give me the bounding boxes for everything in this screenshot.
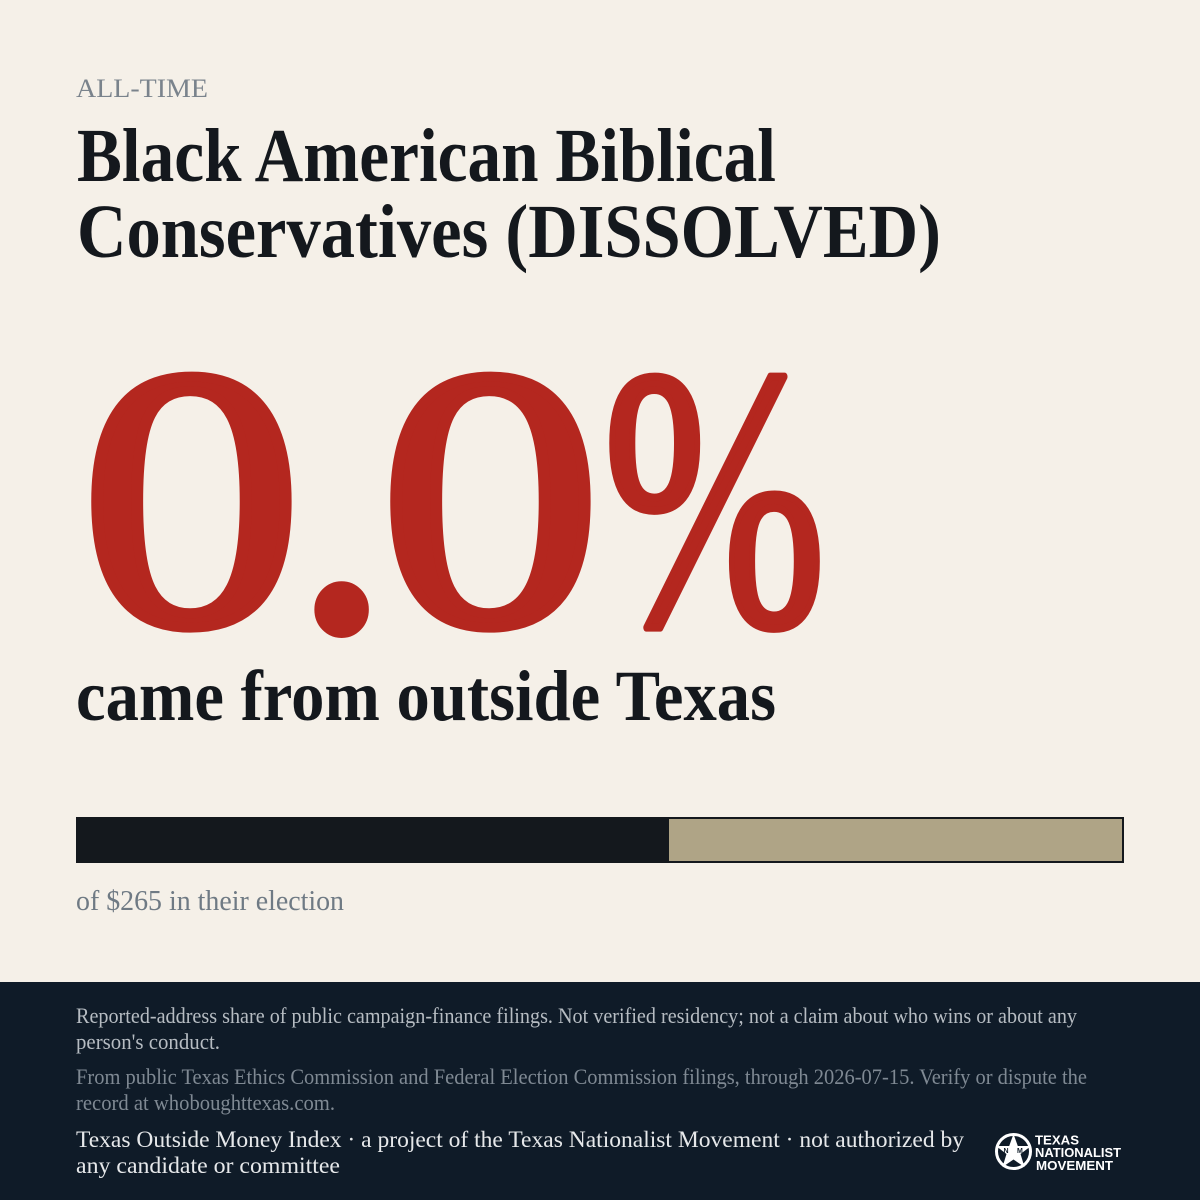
logo: Texas Nationalist Movement (996, 1132, 1121, 1173)
disclaimer text (76, 1003, 1077, 1054)
source text (76, 1064, 1087, 1115)
logo wordmark: TEXAS (1035, 1132, 1079, 1148)
big percentage: 0 (80, 293, 303, 705)
attribution text: any candidate or committee (76, 1153, 340, 1178)
source text: From public Texas Ethics Commission and Federal Election Commission filings, through 2026-07-15. Verify or dispute the (76, 1064, 1087, 1089)
bar caption: of $265 in their election (76, 885, 344, 917)
source text: record at whoboughttexas.com. (76, 1090, 335, 1115)
subheading: came from outside Texas (76, 656, 776, 736)
big percentage: % (603, 293, 826, 705)
big percentage (80, 293, 826, 710)
attribution text (76, 1127, 964, 1178)
big percentage: 0 (379, 293, 602, 705)
progress bar (76, 817, 1124, 863)
title: Black American Biblical (77, 114, 776, 198)
icon: star in circle: M (1017, 1148, 1023, 1155)
logo wordmark: NATIONALIST (1035, 1145, 1121, 1160)
big percentage: . (300, 322, 384, 710)
title (77, 114, 941, 274)
eyebrow label: ALL-TIME (76, 74, 208, 103)
disclaimer text: person's conduct. (76, 1029, 220, 1054)
logo wordmark (1035, 1132, 1121, 1173)
footer panel (0, 982, 1200, 1200)
attribution text: Texas Outside Money Index · a project of the Texas Nationalist Movement · not authorized by (76, 1127, 964, 1152)
icon: star in circle (996, 1134, 1031, 1168)
logo wordmark: MOVEMENT (1036, 1158, 1113, 1173)
title: Conservatives (DISSOLVED) (77, 190, 941, 274)
icon: star in circle: N (1004, 1148, 1009, 1155)
disclaimer text: Reported-address share of public campaign-finance filings. Not verified residency; not a claim about who wins or about any (76, 1003, 1077, 1028)
